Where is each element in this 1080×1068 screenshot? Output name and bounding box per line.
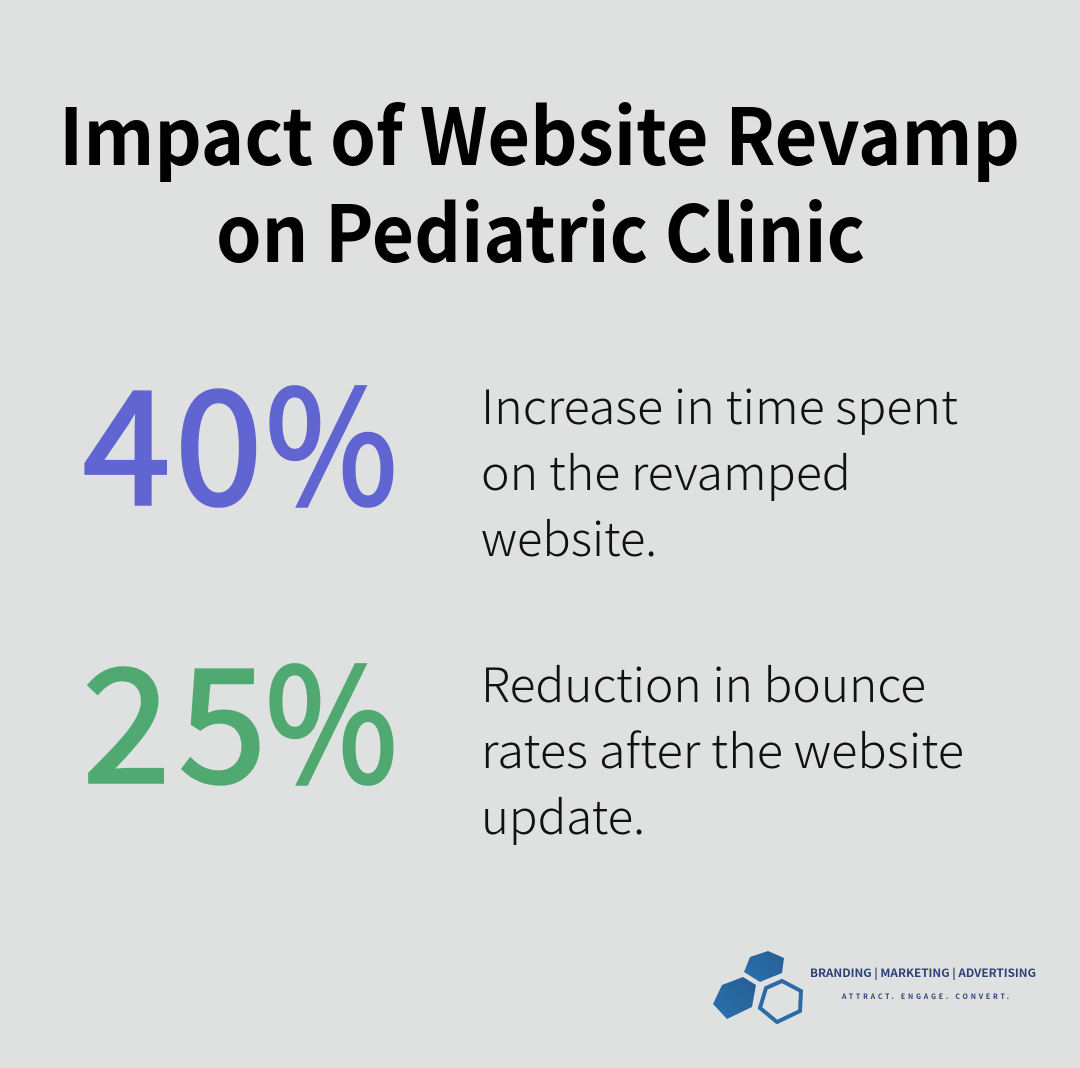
logo xyxy=(713,951,1036,1022)
stat: 25%: 2 xyxy=(83,601,170,828)
stat: 25% xyxy=(83,601,397,828)
description: bounce rates: rates after the website xyxy=(481,713,964,782)
icon: top filled hexagon xyxy=(744,951,784,982)
description: bounce rates xyxy=(481,647,964,848)
stat: 40% xyxy=(83,323,397,550)
stat: 40%: % xyxy=(265,323,397,550)
description: time spent: Increase in time spent xyxy=(481,369,958,438)
logo tagline: motto: ATTRACT. ENGAGE. CONVERT. xyxy=(841,992,1009,1002)
stat: 25%: 5 xyxy=(179,601,266,828)
title: on Pediatric Clinic xyxy=(216,173,865,285)
description: time spent: on the revamped xyxy=(481,435,851,504)
description: time spent: website. xyxy=(481,501,657,570)
icon: outlined hexagon xyxy=(760,981,801,1022)
stat: 40%: 4 xyxy=(83,323,170,550)
icon: left filled hexagon xyxy=(713,977,756,1019)
description: bounce rates: Reduction in bounce xyxy=(481,647,926,716)
title: Impact of Website Revamp xyxy=(59,76,1020,188)
logo tagline: services: BRANDING | MARKETING | ADVERTISING xyxy=(810,965,1036,981)
description: bounce rates: update. xyxy=(481,779,645,848)
title xyxy=(59,76,1020,285)
stat: 25%: % xyxy=(265,601,397,828)
stat: 40%: 0 xyxy=(175,323,262,550)
description: time spent xyxy=(481,369,958,570)
